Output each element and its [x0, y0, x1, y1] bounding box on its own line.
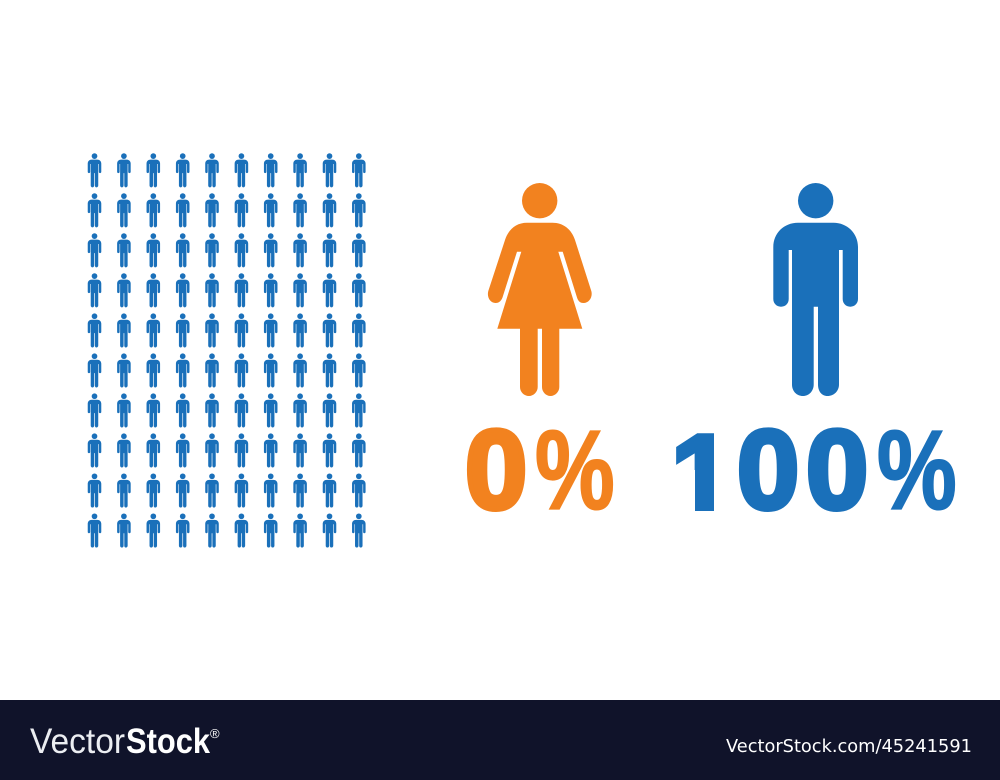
icon: woman figure: [488, 183, 592, 396]
footer band: [0, 700, 1000, 780]
pictogram grid: 100 people, all male: [88, 153, 366, 548]
percentage: 100% men: %: [877, 408, 957, 533]
percentage: 100% men: 0: [806, 408, 868, 532]
VectorStock logo: [30, 722, 220, 761]
percentage: 100% men: 0: [737, 408, 799, 532]
percentage: 0% women: %: [535, 408, 615, 533]
image id caption: VectorStock.com/45241591: [726, 737, 972, 757]
percentage: 0% women: [465, 408, 615, 533]
percentage: 0% women: 0: [465, 408, 527, 532]
VectorStock logo: Vector: [30, 722, 125, 761]
VectorStock logo: Stock: [126, 722, 210, 761]
VectorStock logo: ®: [210, 726, 220, 741]
percentage: 100% men: [676, 427, 956, 512]
icon: man figure: [773, 183, 858, 396]
percentage: 100% men: 1: [671, 412, 733, 537]
